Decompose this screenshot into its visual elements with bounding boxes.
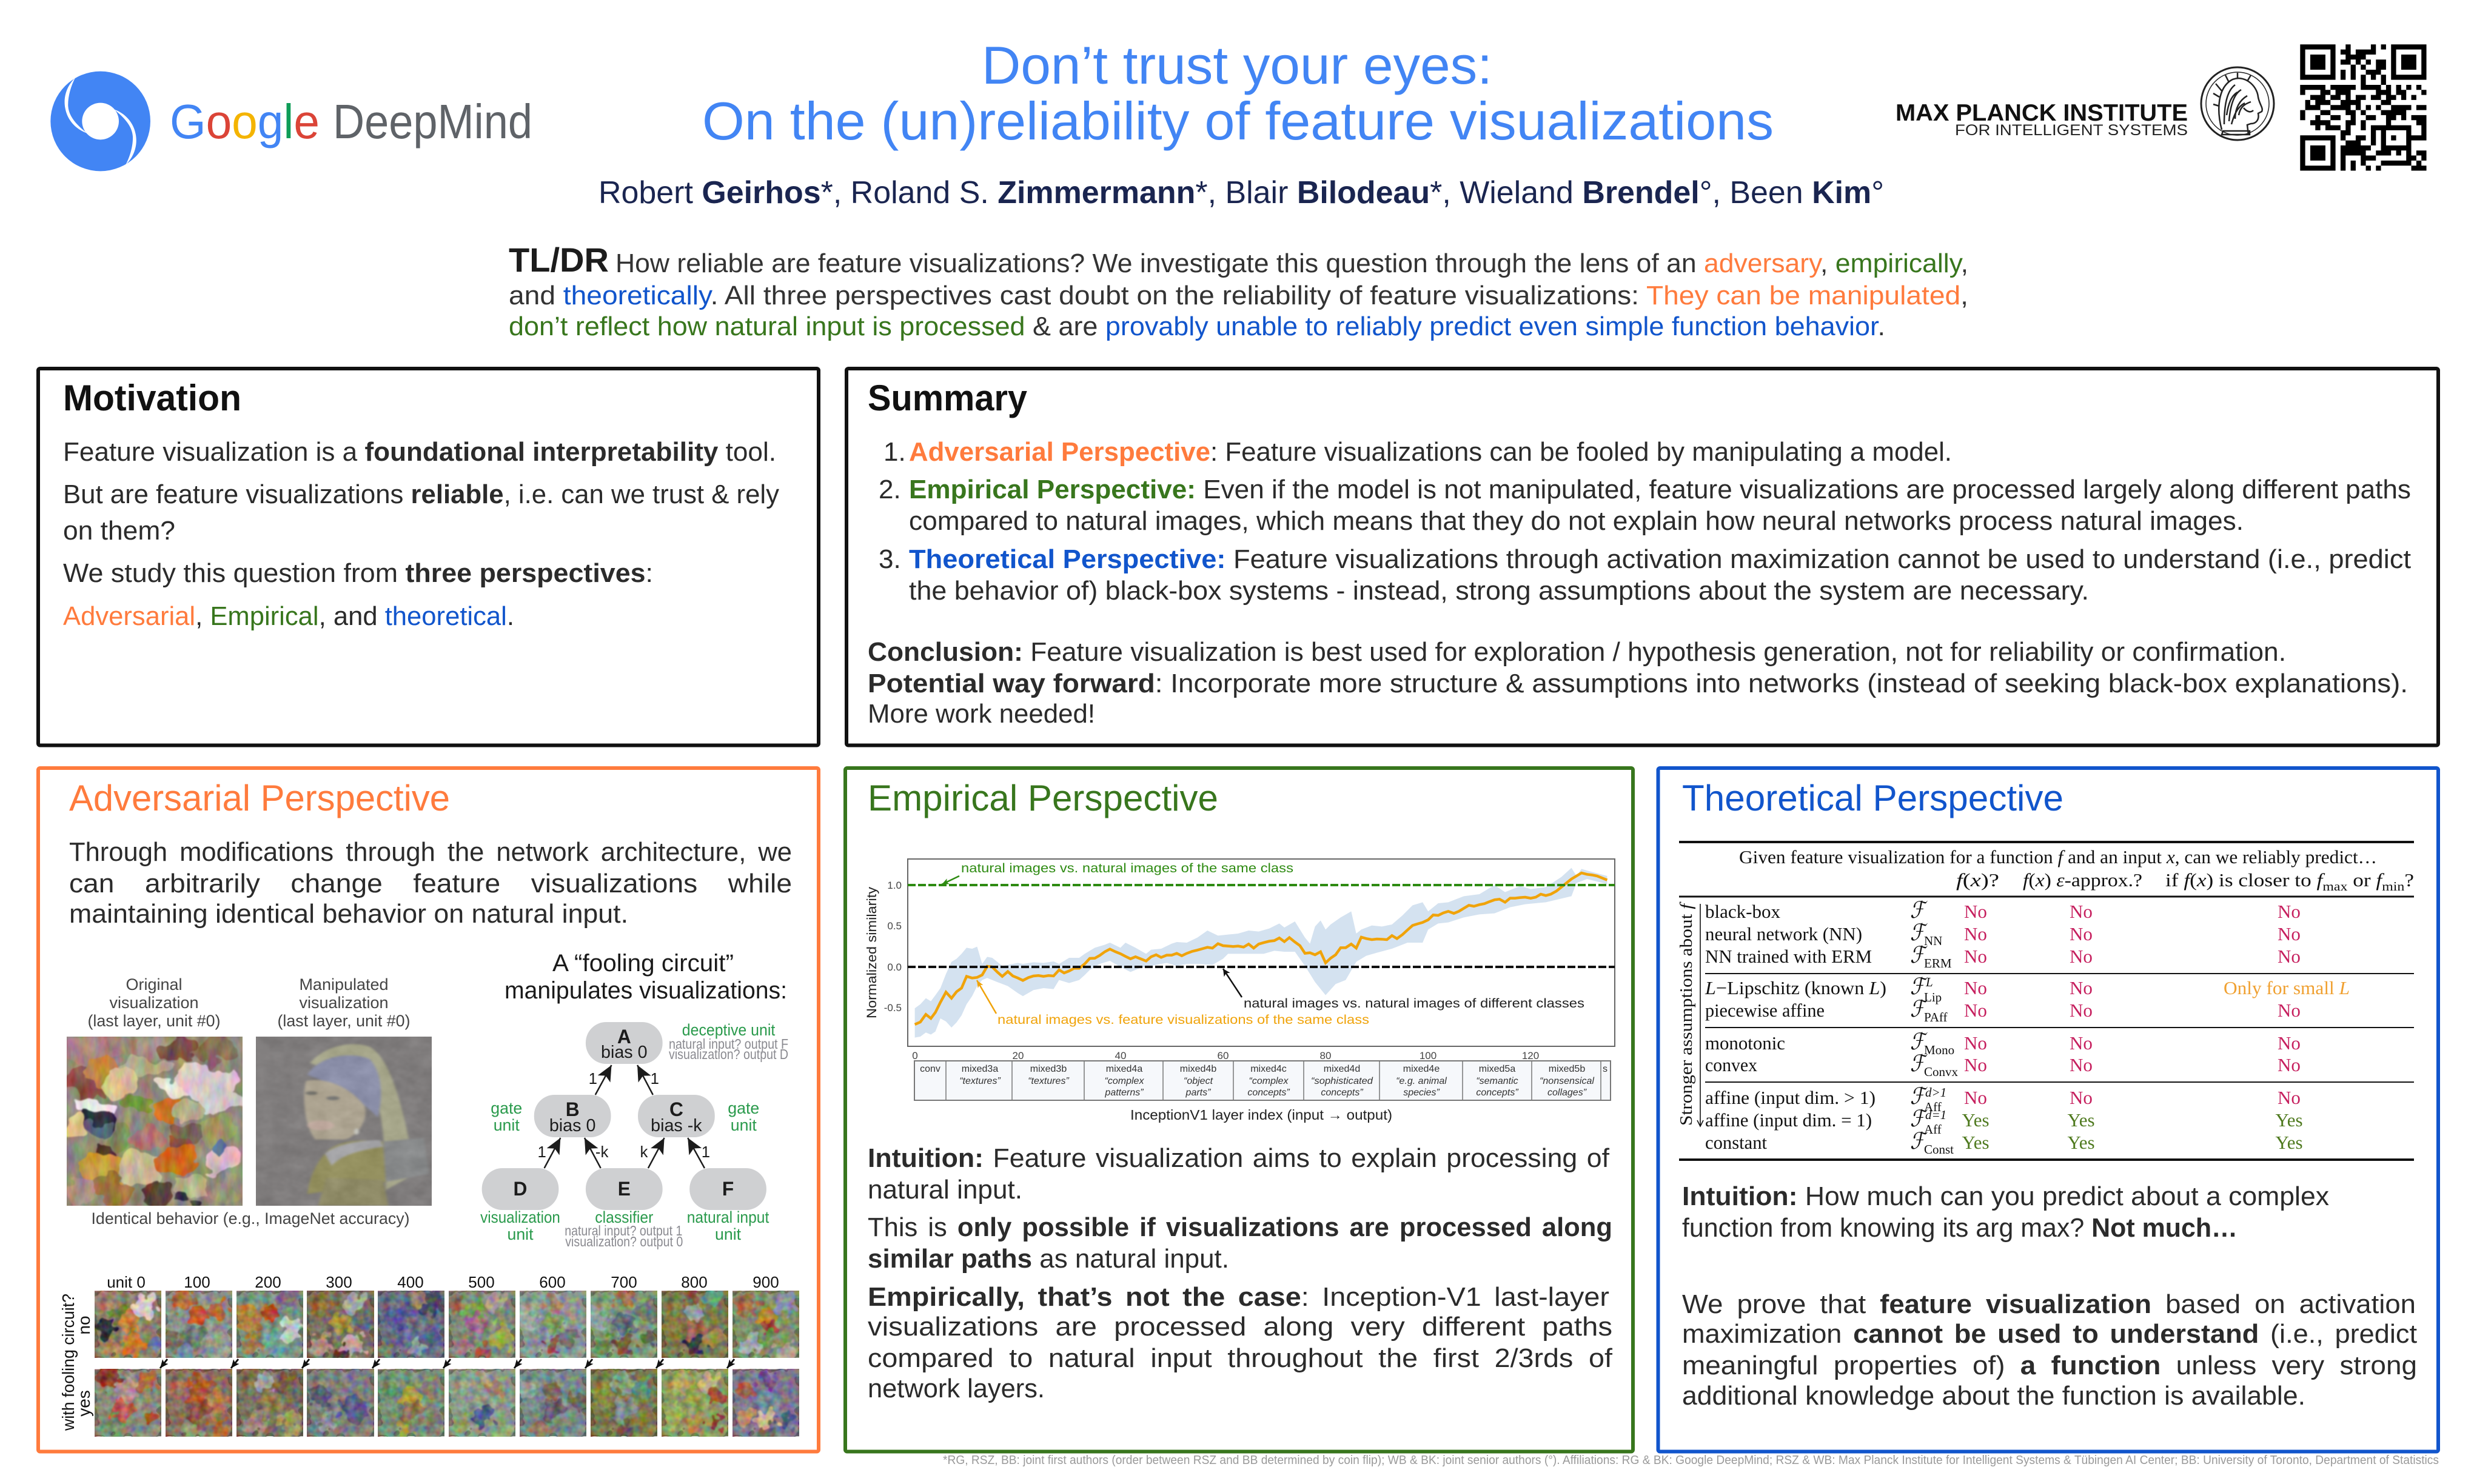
layer table: parts” [1185,1088,1211,1098]
table header: min [2382,879,2405,894]
text block: theoretical result: maximization cannot be used to understand (i.e., predict [1682,1319,2417,1349]
image captions: original visualization: visualization [109,994,199,1012]
node C: C [669,1098,683,1120]
row labels: constant [1705,1132,1767,1153]
layer table: mixed3a [962,1064,998,1074]
row labels [1705,901,1886,1153]
row labels: neural network (NN) [1705,923,1862,944]
unit labels: deceptive unit [682,1021,776,1039]
heading: Summary: Summary [868,378,1028,418]
axis ticks: 100 [1420,1050,1436,1061]
title: On the (un)reliability of feature visualizations [702,91,1774,151]
edge weights [537,1071,710,1161]
panel: Summary [846,369,2438,746]
line chart: normalized similarity [864,859,1615,1123]
table answers: No [2070,946,2093,967]
text block: motivation body: Adversarial, Empirical, and theoretical. [63,601,514,631]
table answers: Yes [2067,1109,2095,1131]
axis ticks: 0.0 [887,961,902,973]
function class symbols [1910,898,1959,1157]
layer table: collages” [1547,1088,1587,1098]
text block: theoretical result: meaningful properties of) a function unless very strong [1682,1351,2417,1380]
unit labels: natural input? output 1 [565,1223,682,1238]
unit labels: natural input? output F [669,1036,788,1052]
table answers: Yes [1962,1109,1990,1131]
layer table: mixed4b [1180,1064,1216,1074]
text block: motivation body [63,437,779,631]
row labels: convex [1705,1054,1757,1075]
image grid: units with and without fooling circuit [59,1273,799,1442]
text block: numbered perspectives: the behavior of) black-box systems - instead, strong assumptions about the system are necessary. [909,576,2089,606]
node D [482,1168,558,1210]
layer table: mixed5a [1479,1064,1515,1074]
annotation: different classes [1223,969,1584,1011]
y axis label: Normalized similarity [864,887,879,1018]
table answers: No [2278,923,2301,944]
row labels: piecewise affine [1705,1000,1825,1021]
text block: adversarial intro: Through modifications through the network architecture, we [69,837,792,867]
node E: E [618,1178,631,1200]
image captions: original visualization [87,975,221,1030]
function class symbols: PAff [1924,1010,1948,1024]
function class symbols: ℱ [1910,943,1928,968]
text block: adversarial intro [69,837,792,929]
thumbnail row: with circuit [95,1365,799,1442]
unit labels [480,1021,788,1249]
unit labels: gate [491,1099,522,1117]
text block: numbered perspectives: 2. [879,475,901,504]
TL/DR: don’t reflect how natural input is processed & are provably unable to reliably predict even simple function behavior . [509,312,1885,341]
row labels: black-box [1705,901,1780,922]
table header: if f(x) is closer to f [2165,869,2322,891]
text block: empirical body: natural input. [868,1175,1022,1205]
text block: motivation body: We study this question from three perspectives: [63,558,653,588]
TL/DR [509,241,1968,341]
TL/DR: How reliable are feature visualizations? We investigate this question through the lens of an adversary, empirically, [615,249,1968,278]
unit labels: 200 [255,1273,281,1291]
axis ticks: 120 [1522,1050,1539,1061]
edge weights: 1 [537,1144,546,1161]
table header: ? [2404,869,2414,891]
layer table: “e.g. animal [1396,1076,1447,1086]
table header: f(x)? [1956,869,1999,891]
edge weights: 1 [589,1071,597,1088]
logo: Max Planck Institute [1896,67,2274,140]
arrows between nodes [545,1065,705,1168]
table answers: No [2070,923,2093,944]
layer table: mixed4c [1250,1064,1287,1074]
TL/DR: TL/DR [509,241,609,279]
table rules [1679,842,2414,1160]
unit labels: 500 [468,1273,495,1291]
axis ticks: 80 [1320,1050,1331,1061]
logo wordmark: Google: Google [170,95,320,149]
text block: theoretical result: We prove that feature visualization based on activation [1682,1289,2416,1319]
layer table: mixed5b [1549,1064,1585,1074]
reference lines [908,885,1615,967]
layer table: “complex [1249,1076,1289,1086]
text block: empirical body: network layers. [868,1374,1045,1403]
unit labels [107,1273,779,1291]
table answers: Yes [2275,1109,2303,1131]
function class symbols: NN [1924,934,1942,948]
row axis labels: with fooling circuit? [59,1294,78,1431]
unit labels: 100 [184,1273,210,1291]
layer table: concepts” [1321,1088,1363,1098]
node B: B [566,1098,580,1120]
panel: Motivation [38,369,819,746]
unit labels: visualization [480,1208,560,1226]
unit labels: unit [507,1225,534,1243]
annotation: same class natural: natural images vs. natural images of the same class [961,861,1293,875]
confidence band and similarity line [915,868,1607,1038]
layer table: mixed3b [1030,1064,1067,1074]
table answers: No [2070,1054,2093,1075]
unit labels: visualization? output 0 [565,1234,683,1249]
node F: F [722,1178,734,1200]
edge weights: 1 [702,1144,710,1161]
axis ticks: 0 [912,1050,918,1061]
thumbnail row: without circuit [93,1286,799,1363]
text block: motivation body: on them? [63,516,175,546]
function class symbols: ERM [1924,956,1952,971]
diagram: fooling circuit [480,1021,788,1249]
table answers: No [1964,901,1987,922]
function class symbols: ℱ [1910,920,1928,946]
function class symbols: L [1925,975,1933,989]
title: Don’t trust your eyes: [982,35,1492,95]
image captions: original visualization: Original [126,975,183,994]
node B [534,1095,611,1137]
node E [586,1168,663,1210]
table answers: No [2278,946,2301,967]
QR code [2300,44,2427,171]
panel: Adversarial Perspective [38,768,819,1451]
function class symbols: Lip [1924,990,1942,1004]
logo: Max Planck Institute: MAX PLANCK INSTITUTE [1896,100,2188,126]
function class symbols: ℱ [1910,1029,1928,1055]
text block: empirical body: compared to natural input throughout the first 2/3rds of [868,1343,1613,1373]
function class symbols: Mono [1924,1043,1954,1057]
arrows between rows [160,1359,734,1368]
function class symbols: d=1 [1925,1108,1946,1122]
image captions: manipulated visualization [278,975,410,1030]
layer table: “complex [1105,1076,1144,1086]
layer table: “textures” [959,1076,1001,1086]
unit labels: natural input [687,1208,769,1226]
unit labels: unit [715,1225,742,1243]
text block: empirical body: This is only possible if visualizations are processed along [868,1212,1612,1242]
function class symbols: ℱ [1910,1106,1928,1132]
unit labels: unit [494,1116,520,1134]
table answers: Only for small L [2224,977,2350,998]
axis ticks: 20 [1013,1050,1024,1061]
icon: DeepMind swirl [50,72,150,171]
table answers: No [2070,1000,2093,1021]
fooling circuit heading [505,950,787,1004]
table answers: No [1964,1000,1987,1021]
text block: conclusion: Potential way forward : Incorporate more structure & assumptions into networks (instead of seeking black-box explanations). [868,669,2408,698]
text block: empirical body: Empirically, that’s not the case : Inception-V1 last-layer [868,1282,1609,1312]
text block: theoretical intuition: function from knowing its arg max? Not much… [1682,1213,2238,1243]
table header: f [2376,869,2385,891]
layer table: patterns” [1104,1088,1144,1098]
layer table: mixed4e [1403,1064,1440,1074]
table answers: No [1964,1032,1987,1054]
image: manipulated visualization [256,1037,432,1206]
text block: numbered perspectives: 3. [879,544,901,574]
image captions: original visualization: (last layer, unit #0) [87,1012,221,1030]
function class symbols: ℱ [1910,974,1928,1000]
text block: numbered perspectives: 1. [883,437,906,467]
table answers: Yes [2067,1132,2095,1153]
results table [1677,842,2414,1160]
layer table: species” [1403,1088,1440,1098]
axis ticks: 40 [1115,1050,1126,1061]
table answers: No [1964,946,1987,967]
axis ticks: -0.5 [884,1002,902,1014]
authors: Robert Geirhos*, Roland S. Zimmermann*, Blair Bilodeau*, Wieland Brendel°, Been Kim° [598,175,1884,210]
table answers: No [2070,977,2093,998]
axis ticks: 0.5 [887,920,902,932]
text block: numbered perspectives [879,437,2411,606]
unit labels: visualization? output D [669,1046,788,1062]
node A [586,1022,663,1064]
table answers: No [1964,1054,1987,1075]
layer table: “sophisticated [1311,1076,1373,1086]
function class symbols: Convx [1924,1065,1959,1079]
text block: empirical body [868,1143,1613,1403]
image: original visualization [67,1037,243,1206]
unit labels: 300 [326,1273,352,1291]
fooling circuit heading: A “fooling circuit” [552,950,734,977]
layer table: “textures” [1028,1076,1069,1086]
text block: numbered perspectives: Adversarial Perspective: Feature visualizations can be fooled by manipulating a model. [909,437,1952,467]
axis ticks: 60 [1218,1050,1229,1061]
text block: numbered perspectives: Empirical Perspective: Even if the model is not manipulated, feature visualizations are processed largely along different paths [909,475,2411,504]
layer table: “object [1184,1076,1213,1086]
text block: numbered perspectives: compared to natural images, which means that they do not explain how neural networks process natural images. [909,506,2244,536]
axis ticks: 1.0 [887,880,902,891]
text block: empirical body: visualizations are processed along very different paths [868,1312,1612,1342]
table answers: No [2278,1054,2301,1075]
unit labels: 700 [611,1273,637,1291]
layer table: conv [920,1064,940,1074]
function class symbols: ℱ [1910,1129,1928,1154]
table header [1739,846,2414,894]
table answers: No [2278,1087,2301,1108]
heading: Motivation: Motivation [63,378,241,418]
row labels: NN trained with ERM [1705,946,1872,967]
function class symbols: Const [1924,1142,1954,1157]
table answers: No [2070,901,2093,922]
edge weights: -k [595,1144,608,1161]
edge weights: k [640,1144,648,1161]
function class symbols: ℱ [1910,898,1928,923]
layer table: mixed4d [1324,1064,1360,1074]
unit labels: 400 [397,1273,424,1291]
heading: Adversarial Perspective: Adversarial Perspective [69,778,450,818]
table answers: No [2278,1000,2301,1021]
function class symbols: ℱ [1910,1084,1928,1109]
row labels: affine (input dim. > 1) [1705,1087,1876,1108]
unit labels: unit 0 [107,1273,146,1291]
logo wordmark: DeepMind: DeepMind [333,95,532,149]
text block: numbered perspectives: Theoretical Perspective: Feature visualizations through activation maximization cannot be used to understand (i.e., predict [909,544,2411,574]
row labels: affine (input dim. = 1) [1705,1109,1872,1131]
table header: Given feature visualization for a function f and an input x, can we reliably predict… [1739,846,2377,867]
table answers: Yes [2275,1132,2303,1153]
layer table: s [1603,1064,1607,1074]
node B: bias 0 [549,1116,595,1135]
text block: theoretical result: additional knowledge about the function is available. [1682,1381,2305,1411]
layer table [914,1061,1611,1100]
caption: identical behavior: Identical behavior (e.g., ImageNet accuracy) [91,1209,410,1228]
table answers: No [2278,901,2301,922]
text block: motivation body: Feature visualization is a foundational interpretability tool. [63,437,776,467]
text block: theoretical intuition: Intuition: How much can you predict about a complex [1682,1182,2329,1211]
text block: conclusion [868,637,2408,729]
x axis label: InceptionV1 layer index (input → output) [1130,1107,1392,1123]
icon: Minerva seal [2201,67,2274,140]
logo: Google DeepMind [50,72,532,171]
image captions: manipulated visualization: (last layer, unit #0) [278,1012,410,1030]
annotation: different classes: natural images vs. natural images of different classes [1244,997,1584,1011]
node A: bias 0 [601,1043,648,1062]
table answers: No [2070,1087,2093,1108]
image captions: manipulated visualization: visualization [299,994,389,1012]
row labels: monotonic [1705,1032,1785,1054]
logo: Max Planck Institute: FOR INTELLIGENT SYSTEMS [1955,122,2188,139]
image captions: manipulated visualization: Manipulated [299,975,389,994]
layer table: “semantic [1476,1076,1518,1086]
text block: adversarial intro: maintaining identical behavior on natural input. [69,899,628,929]
unit labels: 600 [539,1273,566,1291]
table answers: No [2278,1032,2301,1054]
function class symbols: ℱ [1910,1051,1928,1077]
layer table: concepts” [1476,1088,1518,1098]
node C [638,1095,715,1137]
table header: or [2347,869,2376,891]
function class symbols: Aff [1924,1100,1942,1114]
TL/DR: and theoretically . All three perspectives cast doubt on the reliability of feature visualizations: They can be manipulated , [509,281,1968,310]
unit labels: 800 [681,1273,708,1291]
annotation: feature visualizations: natural images vs. feature visualizations of the same class [997,1013,1369,1027]
title [702,35,1774,151]
unit labels: classifier [595,1208,653,1226]
table header: max [2322,879,2348,894]
table answers: No [1964,923,1987,944]
footnote: *RG, RSZ, BB: joint first authors (order between RSZ and BB determined by coin flip); WB & BK: joint senior authors (°). Affiliations: RG & BK: Google DeepMind; RSZ & WB: Max Planck Institute for Intelligent Systems & Tübingen AI Center; BB: University of Toronto, Department of Statistics [943,1454,2439,1467]
text block: empirical body: similar paths as natural input. [868,1244,1229,1274]
node A: A [617,1026,631,1048]
text block: motivation body: But are feature visualizations reliable, i.e. can we trust & rely [63,480,779,509]
row axis labels [59,1294,93,1431]
table answers [1962,901,2350,1153]
annotation: same class natural [942,861,1293,884]
fooling circuit heading: manipulates visualizations: [505,977,787,1004]
axis ticks [884,880,1539,1061]
heading: Theoretical Perspective: Theoretical Perspective [1682,778,2063,818]
function class symbols: Aff [1924,1122,1942,1137]
unit labels: gate [728,1099,759,1117]
layer table: concepts” [1247,1088,1290,1098]
row axis labels: no [75,1315,93,1335]
text block: theoretical result [1682,1289,2417,1411]
heading: Empirical Perspective: Empirical Perspective [868,778,1218,818]
row axis labels: yes [75,1390,93,1417]
unit labels: unit [731,1116,757,1134]
table answers: No [1964,977,1987,998]
layer table: mixed4a [1106,1064,1142,1074]
text block: conclusion: More work needed! [868,699,1095,729]
panel: Empirical Perspective [845,768,1633,1451]
table answers: No [1964,1087,1987,1108]
layer table: “nonsensical [1540,1076,1594,1086]
side axis: stronger assumptions: Stronger assumptions about f [1677,901,1696,1126]
table answers: No [2070,1032,2093,1054]
node C: bias -k [651,1116,702,1135]
panel: Theoretical Perspective [1658,768,2438,1451]
unit labels: 900 [753,1273,779,1291]
text block: empirical body: Intuition: Feature visualization aims to explain processing of [868,1143,1610,1173]
row labels: L−Lipschitz (known L) [1705,977,1886,998]
node D: D [514,1178,527,1200]
table header: f(x) ε-approx.? [2023,869,2142,891]
edge weights: 1 [651,1071,659,1088]
text block: conclusion: Conclusion: Feature visualization is best used for exploration / hypothesis generation, not for reliability or confirmation. [868,637,2286,667]
annotation: feature visualizations [977,980,1369,1027]
function class symbols: ℱ [1910,997,1928,1022]
function class symbols: d>1 [1925,1085,1946,1100]
text block: theoretical intuition [1682,1182,2329,1243]
table answers: Yes [1962,1132,1990,1153]
text block: adversarial intro: can arbitrarily change feature visualizations while [69,869,792,898]
node F [689,1168,766,1210]
